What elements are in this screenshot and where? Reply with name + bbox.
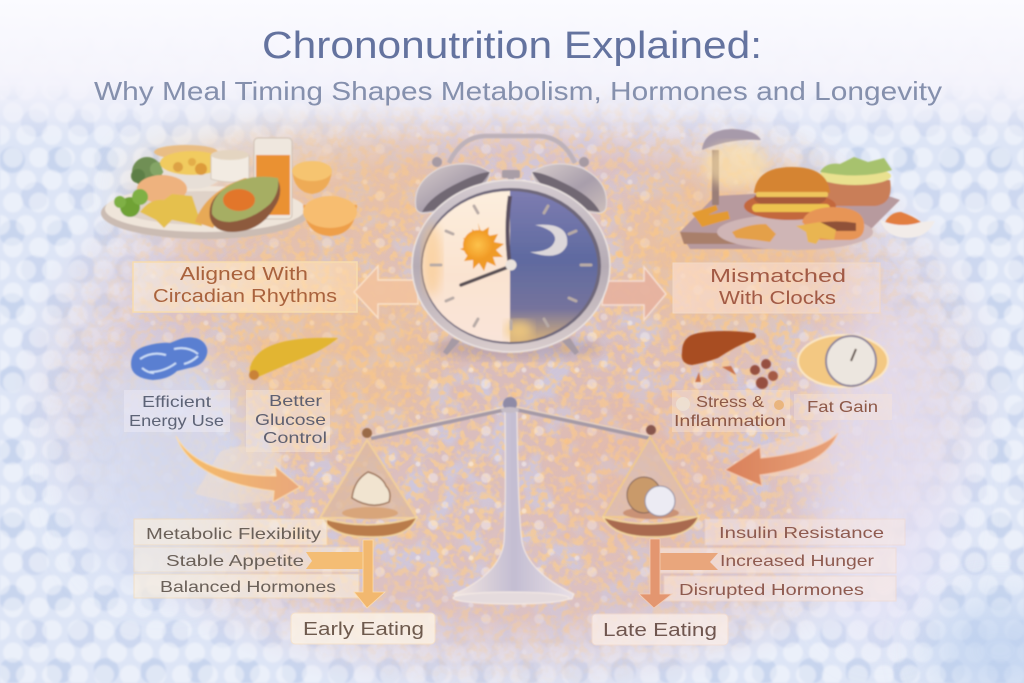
label: early eating: Early Eating — [303, 619, 424, 639]
list: late eating effects: Insulin Resistance — [719, 525, 884, 542]
icon: mitochondria — [131, 337, 207, 380]
text: fat gain — [794, 394, 892, 420]
label: mismatched with clocks — [673, 263, 880, 313]
text: better glucose control — [246, 390, 330, 452]
faded emblem left — [195, 447, 282, 504]
text: better glucose control: Glucose — [255, 412, 326, 429]
label: aligned with circadian rhythms: Aligned With — [180, 264, 308, 284]
label: mismatched with clocks: Mismatched — [710, 266, 846, 286]
faded emblem right — [744, 432, 834, 476]
text: fat gain: Fat Gain — [807, 399, 878, 416]
arrow: increased hunger connector — [660, 553, 718, 570]
label: late eating — [592, 614, 728, 645]
arrow: down to late eating — [639, 539, 672, 608]
icon: pancreas — [249, 338, 338, 380]
list: early eating benefits: Metabolic Flexibility — [146, 526, 321, 543]
arrow: down to early eating — [354, 540, 385, 608]
label: aligned with circadian rhythms: Circadian Rhythms — [153, 286, 337, 306]
icon: weight scale dial — [798, 335, 888, 387]
right scale pan — [603, 425, 699, 537]
alarm clock — [412, 136, 610, 360]
label: mismatched with clocks: With Clocks — [719, 288, 836, 308]
icon: liver — [682, 331, 778, 389]
arrow: curved to right pan — [725, 433, 838, 486]
text: efficient energy use — [124, 390, 230, 432]
label: late eating: Late Eating — [603, 620, 717, 640]
list: early eating benefits — [134, 519, 370, 598]
text: stress and inflammation: Inflammation — [674, 413, 786, 430]
text: better glucose control: Better — [269, 393, 323, 410]
balance scale — [371, 397, 651, 604]
illustration: late meal tray — [680, 129, 935, 250]
arrow: curved to left pan — [176, 436, 300, 502]
list: early eating benefits: Stable Appetite — [166, 553, 304, 570]
title: Chrononutrition Explained: — [262, 25, 762, 67]
text: efficient energy use: Energy Use — [129, 413, 224, 430]
text: better glucose control: Control — [263, 430, 327, 447]
arrow: left from clock — [354, 266, 418, 318]
text: stress and inflammation — [672, 390, 790, 432]
arrow: right from clock — [602, 267, 666, 320]
subtitle: Why Meal Timing Shapes Metabolism, Hormones and Longevity — [94, 76, 942, 106]
list: early eating benefits: Balanced Hormones — [160, 579, 336, 596]
label: early eating — [291, 613, 435, 644]
list: late eating effects: Increased Hunger — [720, 553, 875, 570]
text: efficient energy use: Efficient — [142, 394, 212, 411]
label: aligned with circadian rhythms — [133, 262, 357, 312]
list: late eating effects: Disrupted Hormones — [679, 582, 864, 599]
text: stress and inflammation: Stress & — [696, 394, 764, 411]
list: late eating effects — [660, 519, 905, 601]
arrow: stable appetite connector — [306, 552, 370, 569]
left scale pan — [320, 428, 417, 537]
illustration: healthy breakfast plate — [101, 138, 357, 239]
